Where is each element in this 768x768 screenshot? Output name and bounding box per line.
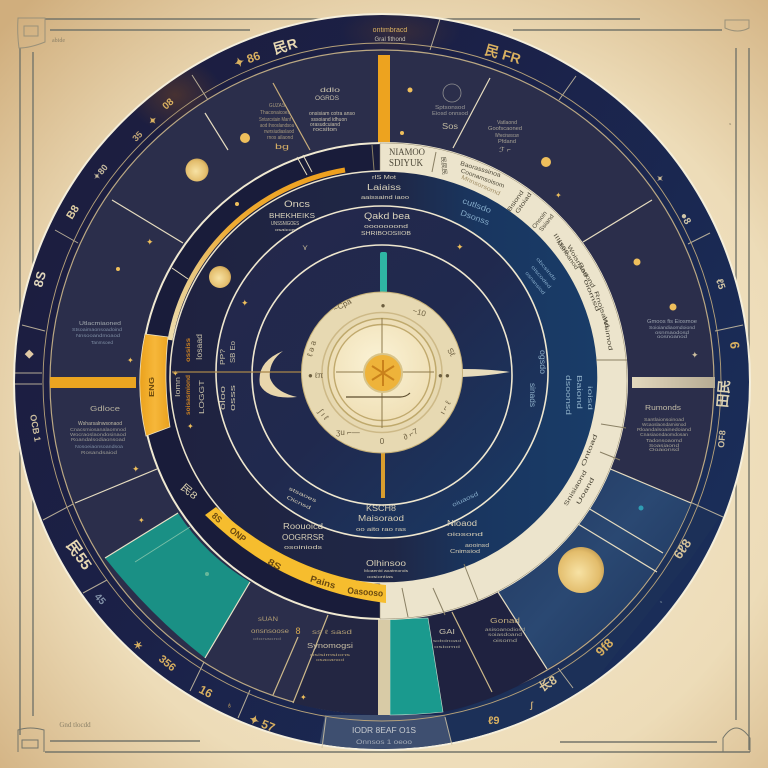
text: cream ring: Gtoiad (515, 192, 534, 215)
text: inner top left: ⋎ (302, 243, 308, 252)
text: cream ring: IIIIsss (551, 233, 570, 256)
text: bottom panels: otonaond (253, 636, 281, 641)
text: top right panel: Wheciraoscan (495, 133, 519, 139)
outer ring glyphs: ʃ (529, 700, 534, 710)
text: top centre panel: rocsiton (313, 127, 337, 133)
text: cream ring: Rnoisand (592, 291, 610, 329)
text: top centre panel: sssoiand idhuon (311, 117, 347, 123)
text: yellow band: ONP (228, 525, 248, 544)
teal sector (105, 513, 250, 658)
text: inner top centre: Qakd bea (364, 211, 410, 221)
text: inner bottom blocks: Roouoicd (283, 522, 323, 531)
outer ring glyphs: 田民 (714, 379, 732, 408)
small stars: ✦ (127, 356, 134, 365)
text: inner bottom blocks: oosiontias (367, 574, 393, 579)
text blocks: dark panels (70, 84, 697, 746)
text: yellow band: Pains (309, 574, 337, 591)
text: top left panel: Thaconaicoes (260, 110, 290, 116)
cream ring tick marks (372, 145, 627, 617)
outer ring glyphs: 民55 (63, 538, 95, 573)
text: top centre panel (309, 88, 355, 133)
text: cream ring: oiomsd (582, 279, 600, 313)
outer ring glyphs: ✦ 86 (232, 48, 262, 71)
text: inner bottom blocks (282, 486, 489, 579)
outer ring glyphs: OF8 (716, 430, 728, 448)
text: bottom panels: sobdnoad (433, 638, 461, 643)
text: bottom panels: Gonad (490, 618, 520, 625)
frame note: right: ◔ (727, 120, 732, 129)
inner chart disc (170, 171, 598, 583)
small stars: ✦ (555, 191, 562, 200)
text: left middle panel: Tanmsoed (91, 340, 114, 345)
text: cream ring: NIAMOO (389, 147, 425, 157)
teal bar bottom (390, 618, 443, 715)
text: inner top left: UNSSNIGOES (271, 221, 300, 227)
text: yellow band: 8S (266, 557, 283, 572)
text: right lower panel: Rloandalsoainedoiand (637, 427, 692, 432)
text: inner top centre: aaissaind iaoo (361, 195, 409, 201)
text: cream ring: Baorasssinoa (459, 161, 502, 179)
outer ring glyphs: 6ℓ8 (670, 536, 694, 562)
text: inner bottom blocks: oo aito rao ras (356, 527, 407, 533)
text: inner left columns: PP? (220, 349, 227, 365)
text: inner top centre: SHRIBOOSIIOB (361, 231, 412, 237)
text: inner left columns: Iomn (175, 377, 182, 397)
outer ring glyphs: ♁ (226, 700, 233, 710)
hub dial text: 0 (380, 437, 385, 446)
corner ornament: top left (18, 18, 45, 48)
planets (116, 88, 699, 702)
hub dial text: ℓ ə a (305, 339, 318, 358)
text: blue band upper right: cutlsdo (461, 196, 493, 215)
text: inner top centre: rIS Mot (372, 175, 397, 181)
text: top right panel: Pfdand (498, 139, 516, 145)
hub dial text: ʒu ⌐— (336, 428, 360, 437)
text: top right panel: ℱ ⌐ (499, 146, 511, 154)
text: cream ring: Wsimod (601, 317, 613, 351)
orange bar top (378, 55, 390, 145)
text: left lower panel: Rosandsaiod (81, 450, 118, 455)
text: inner top left: BHEKHEIKS (269, 213, 315, 220)
text: cream ring: Onsoin (532, 211, 549, 230)
hub dial text: Sℓ (445, 346, 457, 358)
text: inner bottom blocks: aooinsd (465, 543, 489, 549)
planet: mid left (209, 266, 231, 288)
text: inner top centre: Laiaiss (367, 183, 401, 192)
text: right lower panel: Wcaoslaondamisnod (642, 422, 687, 427)
text: right lower panel: Rumonds (645, 405, 682, 412)
outer ring glyphs: 35 (130, 129, 144, 143)
hub dial text: ʃ ı ℓ (316, 407, 331, 422)
outer ring glyphs: 9f8 (593, 635, 616, 659)
outer ring glyphs: 08 (161, 96, 177, 112)
icon: small dial top panel (443, 84, 461, 102)
small stars: ✦ (146, 237, 154, 247)
frame note: bottom left: Gnd tlocdd (59, 721, 91, 729)
text: left middle panel: Utlacmiaoned (79, 321, 121, 327)
main chart panel (50, 50, 714, 714)
orbit ring inner (252, 245, 512, 505)
text: cream ring: Bsiond (507, 190, 526, 213)
orange arc top left (170, 170, 345, 340)
text: bottom panels: ss ℓ sasd (312, 629, 352, 636)
text: right lower panel: Cnasiaondaomdosan (640, 432, 689, 437)
text: top centre panel: OGRDS (315, 96, 339, 102)
small stars: ✦ (172, 369, 179, 378)
text: inner top centre: ooooooond (364, 224, 408, 230)
text: top centre panel: onsisiam cotra anso (309, 111, 355, 117)
text: inner bottom blocks: oiuaosd (452, 491, 480, 509)
outer ring glyphs: ontimbracd (373, 27, 407, 34)
corner ornament: bottom right (723, 728, 750, 752)
small stars: ✦ (241, 298, 249, 308)
text: blue band upper right (459, 196, 558, 296)
text: blue band right: dsoonsd (564, 375, 571, 415)
text: inner bottom blocks: OOGRRSR (282, 533, 324, 542)
small stars: ✦ (456, 242, 464, 252)
text: inner left columns (149, 334, 237, 502)
outer ring glyphs: ✶ (130, 638, 145, 653)
text: bottom panels: asisoanodiosd (485, 627, 526, 632)
text: blue band upper right: obcsinds (534, 257, 558, 283)
text: top left panel: rnos ailaond (267, 135, 293, 141)
text: inner left columns: Iosaad (195, 334, 204, 360)
text: top centre panel: orasudcuiand (310, 122, 340, 128)
text: inner bottom blocks: KSCH8 (366, 504, 397, 513)
text: yellow band: 8S (210, 511, 224, 525)
text: inner bottom blocks: Nioaod (447, 519, 477, 528)
planet: upper left (186, 158, 208, 182)
text: cream ring: 民民民 (439, 157, 448, 175)
crescent moon (259, 351, 297, 398)
outer ring glyphs: ✦ (654, 172, 666, 185)
outer ring glyphs: ●8 (677, 211, 693, 227)
hub dial text: ● ℓπ (308, 371, 324, 380)
text: yellow band: Oasooso (347, 585, 384, 599)
navy band disc (141, 143, 627, 619)
text: top left panel (259, 103, 294, 151)
needle right (462, 369, 510, 377)
text: left middle panel (72, 321, 123, 345)
text: bottom panels: onsnsoose (251, 629, 290, 635)
text: left lower panel: Wsharsalnwsonaod (78, 421, 122, 427)
orange segment left (140, 334, 170, 436)
outer ring glyphs: ◔ (658, 598, 663, 607)
yellow band (205, 507, 386, 603)
outer ring glyphs: 民 FR (483, 42, 523, 67)
text: inner top left: Oncs (284, 199, 311, 209)
text: inner bottom blocks: osoiniods (284, 545, 323, 551)
text: top right panel (488, 120, 522, 154)
text: cream ring: SDIYUK (389, 158, 424, 169)
text: blue band right (528, 350, 592, 415)
radial divider lines (75, 78, 691, 703)
text: inner bottom blocks: Cnimsiod (450, 549, 480, 555)
text: top panel beside dial (432, 105, 468, 131)
text: bottom panels: soiasdoand (488, 632, 523, 637)
text: bottom panels: Synomogsi (307, 643, 354, 650)
outer ring glyphs: ℓ5 (713, 278, 727, 291)
outer ring glyphs: ✦ 57 (247, 712, 277, 735)
outer ring glyphs: ОСВ 1 (28, 414, 43, 442)
text: bottom panels: sUAN (258, 617, 278, 623)
text: blue band upper right: oiscoded (529, 265, 552, 290)
outer ring glyphs: 356 (156, 653, 178, 674)
text: left lower panel: Gdloce (90, 406, 120, 413)
text: top left panel: bg (275, 144, 289, 151)
lower right blue panel (450, 400, 691, 669)
frame note: top left: abide (52, 38, 65, 44)
text: blue band right: Baiond (575, 375, 582, 409)
text: inner left columns: LOGGT (199, 379, 206, 414)
small stars: ✦ (691, 350, 699, 360)
outer ring glyphs: 8S (30, 269, 49, 289)
orange bar left (50, 377, 136, 388)
text: cream ring (389, 147, 613, 507)
text: inner left columns: osss (230, 384, 237, 411)
text: inner top left (269, 199, 315, 252)
hub dial text: ● ● (438, 371, 450, 380)
text: blue band right: sinads (528, 383, 537, 407)
text: cream ring: Rasond (576, 262, 595, 289)
text: cream ring: Ontoad (581, 434, 599, 468)
text: cream ring: Mnnsorsomd (460, 175, 501, 197)
text: left middle panel: Nnsooandmoaod (76, 333, 121, 338)
corner ornament: bottom left (18, 728, 44, 752)
text: bottom panels (251, 617, 526, 746)
text: bottom panels: IODR 8EAF O1S (352, 726, 416, 735)
text: top right panel: Goofscaoned (488, 126, 522, 132)
small stars: ✦ (187, 422, 194, 431)
outer ring glyphs: ◆ (24, 348, 34, 360)
text: inner bottom blocks: Moaenid aoatmonds (364, 568, 408, 573)
text: blue band upper right: Dsonss (459, 208, 490, 227)
outer ring glyphs: Gral fithond (374, 37, 406, 43)
text: right upper panel: oosnoanod (657, 334, 688, 339)
text: top panel beside dial: Eiosd onnsod (432, 111, 468, 117)
text: right upper panel (647, 319, 697, 339)
text: inner bottom blocks: Maisoraod (358, 514, 404, 523)
text: right lower panel: Ooaionsd (649, 447, 680, 452)
text: right lower panel: Santlaionsoinoad (644, 417, 685, 422)
text: right upper panel: Soioiandiaomdoiond (649, 325, 696, 330)
outer ring glyphs: ✦ (147, 114, 160, 128)
planet: large gold (558, 547, 604, 593)
text: left lower panel: Nosoeiaonsoandsoa (75, 444, 124, 449)
text: yellow band (210, 511, 384, 599)
text: inner left columns: 民8 (178, 481, 200, 502)
hub dial text: ~10 (411, 306, 427, 319)
text: cream ring: Msnoanod (555, 240, 579, 271)
text: cream ring: Coonamsoisom (460, 168, 505, 190)
text: top left panel: nwrsiudiaslaod (264, 129, 294, 135)
text: bottom panels: osiomd (434, 644, 460, 649)
outer ring glyphs: B8 (64, 203, 82, 222)
cream half ring (380, 143, 627, 619)
text: blue band right: ioisd (586, 386, 592, 410)
teal needle top (380, 252, 387, 293)
text: bottom panels: osisimsions (310, 652, 350, 657)
text: inner bottom blocks: oiosond (447, 532, 483, 538)
small stars: ✦ (300, 693, 307, 702)
band dividers (172, 155, 312, 279)
text: bottom panels: Onnsos 1 oeoo (356, 740, 413, 746)
text: bottom panels: 8 (295, 626, 301, 636)
corner ornament: top right (725, 20, 749, 31)
outer ring glyphs: 6 (727, 341, 743, 349)
lower centre dark panel (293, 615, 378, 715)
outer ring glyphs: 45 (92, 592, 108, 608)
text: bottom panels: GAI (439, 629, 455, 636)
orange needle bottom (381, 452, 385, 498)
text: inner left columns: soisasmiond (186, 375, 192, 415)
hub dial text: ı ⌐ ℓ (438, 399, 453, 416)
text: cream ring: Snisiaond (564, 470, 589, 507)
text: top centre panel: ddlo (320, 88, 341, 94)
cream bar bottom (378, 618, 390, 715)
text: inner bottom blocks: Olhinsoo (366, 559, 407, 568)
text: top right panel: Vatlaond (497, 120, 517, 126)
outer ring glyphs: ✦80 (91, 162, 110, 182)
text: right upper panel: Gmoos fis Eiosmoe (647, 319, 697, 325)
text: inner left columns: SB Eo (230, 341, 237, 363)
text: inner bottom blocks: stsaoes (288, 486, 318, 505)
outer ring glyphs: 民R (271, 35, 299, 57)
text: inner top left: osaicoe (275, 227, 296, 232)
hub dial text: ● (381, 301, 386, 310)
text: left middle panel: Stsoaimaonsoadoind (72, 327, 123, 332)
text: right lower panel (637, 405, 692, 452)
text: inner left columns: oloo (220, 386, 227, 410)
hub dial text: ∂ ⌐7 (402, 426, 420, 442)
text: top left panel: Sntarcstain Manf (259, 117, 292, 123)
text: bottom panels: oisomd (493, 638, 518, 643)
cream bar right (632, 377, 715, 388)
text: right lower panel: Soasiaond (649, 443, 680, 448)
text: left lower panel: Cnacsmiosanalaomnod (70, 427, 127, 432)
text: cream ring: Woisnaod (565, 244, 588, 279)
text: right lower panel: Tadonsoaomd (646, 438, 683, 443)
text: cream ring: Uoand (576, 477, 596, 506)
text: top left panel: GUZAS (269, 103, 286, 109)
hub dial text: ~Cpa (332, 296, 354, 314)
central hub (302, 292, 462, 453)
horizontal axis (172, 371, 500, 373)
text: top panel beside dial: Sptsonsod (435, 105, 465, 111)
outer ring glyphs: 长8 (536, 672, 560, 695)
text: inner bottom blocks: Oicnsd (285, 495, 312, 511)
text: left lower panel (70, 406, 127, 455)
outer ring glyphs: ℓ9 (488, 715, 500, 727)
text: cream ring: Ssiand (539, 214, 556, 233)
text: right upper panel: osnmaodosd (655, 330, 690, 335)
text: inner left columns: ossiss (186, 337, 192, 362)
text: top panel beside dial: Sos (442, 122, 458, 131)
text: inner top centre (361, 175, 412, 237)
small stars: ✦ (132, 464, 140, 474)
text: bottom panels: osaoanod (316, 657, 344, 662)
text: blue band upper right: osnansiod (523, 271, 546, 296)
text: left lower panel: Roandalsodiaonsoad (71, 437, 126, 442)
outer ring glyphs: 16 (197, 682, 215, 701)
text: top left panel: aod ihooslandsoa (260, 123, 294, 129)
small stars: ✦ (138, 516, 145, 525)
hub centre medallion (364, 354, 402, 392)
hub dial text (305, 296, 457, 446)
ring double line (43, 43, 721, 721)
text: left lower panel: Wocraoslaondosinaod (70, 432, 127, 437)
small stars (116, 88, 699, 702)
lower right dark panel (428, 592, 547, 712)
text: inner left columns: ENG (149, 376, 156, 397)
text: blue band right: ogsdo (538, 350, 547, 375)
orbit ring outer (216, 206, 548, 538)
